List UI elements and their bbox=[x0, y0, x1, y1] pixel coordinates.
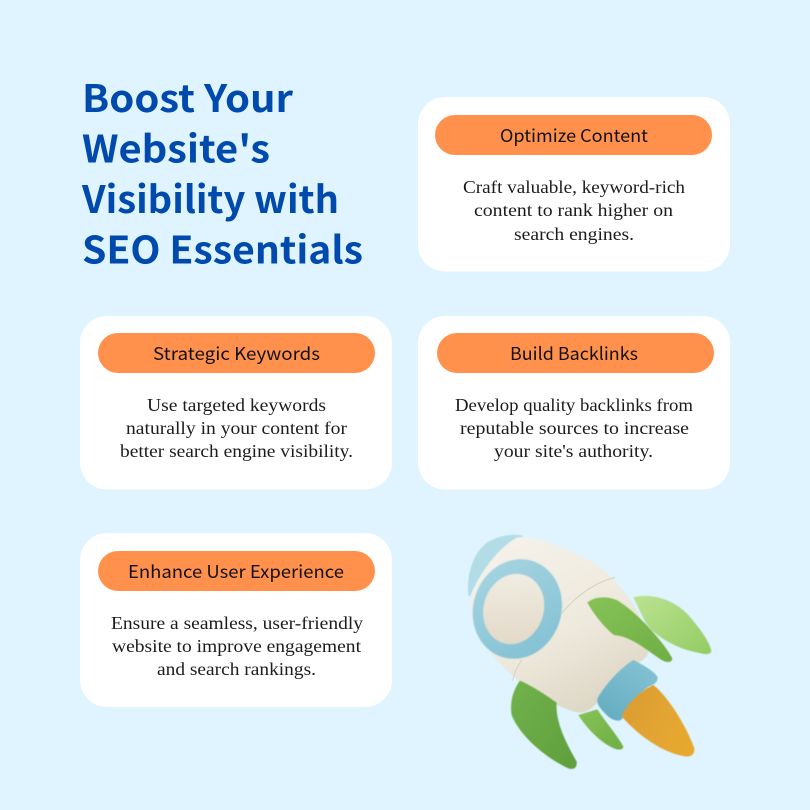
rocket window ring bbox=[460, 548, 575, 670]
text: enhance user experience description bbox=[111, 613, 363, 679]
title: SEO Essentials bbox=[82, 220, 363, 274]
text: build backlinks description: reputable sources to increase bbox=[460, 418, 689, 438]
panel: enhance user experience bbox=[80, 533, 392, 707]
rocket engine collar bbox=[597, 660, 658, 721]
text: strategic keywords description: better search engine visibility. bbox=[120, 441, 353, 461]
text: optimize content description: search engines. bbox=[514, 224, 634, 244]
rocket flame bbox=[622, 685, 694, 756]
text: strategic keywords description bbox=[120, 395, 353, 461]
title bbox=[81, 68, 363, 274]
label pill: strategic keywords bbox=[98, 333, 375, 373]
panel: optimize content bbox=[418, 97, 730, 272]
label pill: build backlinks bbox=[437, 333, 714, 373]
label pill: enhance user experience bbox=[98, 551, 375, 591]
text: enhance user experience description: and search rankings. bbox=[157, 659, 316, 679]
text: build backlinks description: Develop quality backlinks from bbox=[455, 395, 693, 415]
rocket front fin, upper bbox=[587, 597, 672, 662]
label pill: optimize content bbox=[435, 115, 712, 155]
title: Website's bbox=[82, 118, 270, 174]
rocket small lower fin bbox=[578, 709, 623, 750]
rocket body bbox=[471, 537, 648, 713]
panel: strategic keywords bbox=[80, 316, 392, 490]
label pill: enhance user experience: Enhance User Experience bbox=[128, 559, 344, 584]
title: Visibility with bbox=[81, 169, 339, 224]
label pill: build backlinks: Build Backlinks bbox=[510, 341, 638, 366]
rocket front fin, lower bbox=[511, 681, 577, 769]
label pill: strategic keywords: Strategic Keywords bbox=[153, 341, 320, 366]
text: enhance user experience description: website to improve engagement bbox=[112, 636, 361, 656]
text: enhance user experience description: Ensure a seamless, user-friendly bbox=[111, 613, 363, 633]
icon: rocket bbox=[460, 535, 711, 769]
rocket window bbox=[474, 566, 553, 652]
text: strategic keywords description: naturally in your content for bbox=[126, 418, 347, 438]
text: build backlinks description: your site's authority. bbox=[494, 441, 653, 461]
rocket nose cap bbox=[468, 535, 523, 597]
text: build backlinks description bbox=[455, 395, 693, 461]
text: strategic keywords description: Use targeted keywords bbox=[147, 395, 326, 415]
title: Boost Your bbox=[82, 68, 294, 123]
text: optimize content description: content to rank higher on bbox=[474, 200, 673, 220]
rocket back fin, light green bbox=[633, 596, 711, 654]
panel: build backlinks bbox=[418, 316, 730, 490]
label pill: optimize content: Optimize Content bbox=[500, 123, 648, 148]
rocket body seam bbox=[513, 577, 615, 681]
text: optimize content description bbox=[463, 177, 685, 244]
text: optimize content description: Craft valuable, keyword-rich bbox=[463, 177, 685, 197]
